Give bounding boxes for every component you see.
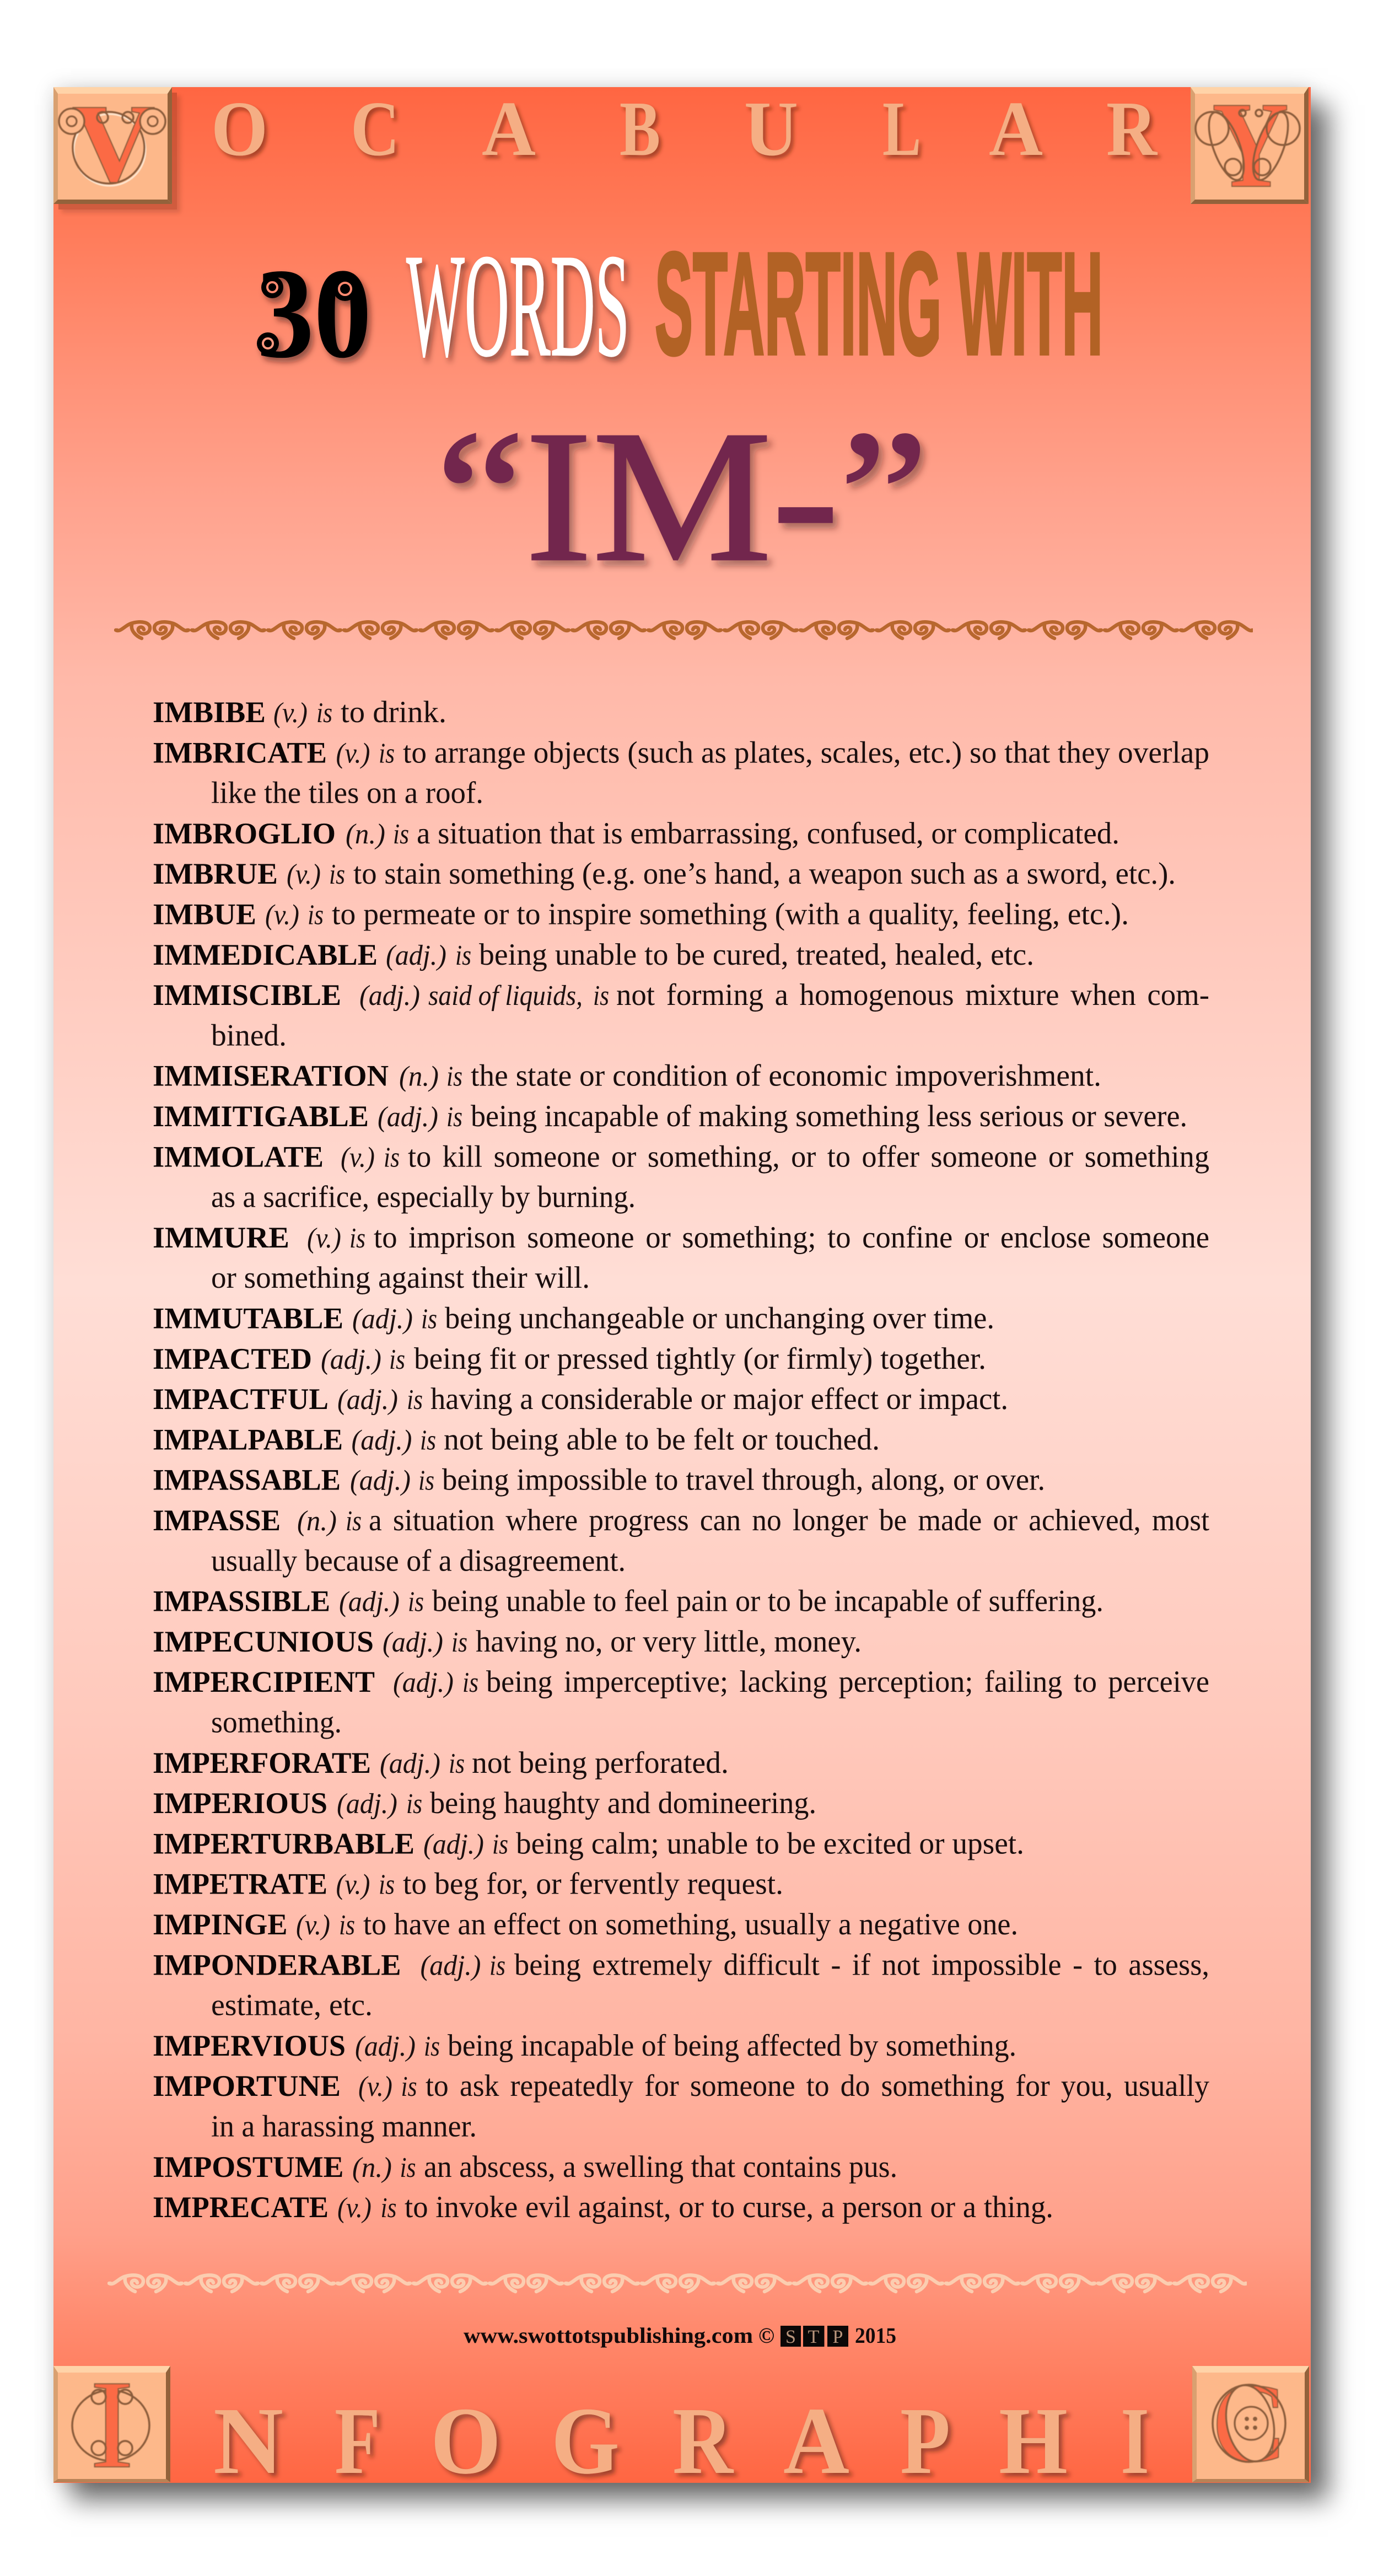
entry: imbibe [153,695,446,729]
entry: imponderable: (adj.) [420,1950,481,1981]
ornament divider: upper [114,620,1253,641]
entry: imbricate [153,735,1209,810]
entry: imperturbable: (adj.) [423,1829,484,1860]
entry: imponderable: is [489,1950,505,1981]
entry: imbibe: (v.) [273,697,308,729]
entry: imbue: to permeate or to inspire something (with a quality, feeling, etc.). [332,897,1129,932]
entry: impostume: is [400,2152,416,2184]
entry: impasse: a situation where progress can no longer be made or achieved, most [369,1503,1209,1537]
entry: impercipient: IMPERCIPIENT [153,1665,375,1698]
footer credit: 2015 [855,2323,896,2348]
entry: immolate: is [384,1142,400,1173]
entry: impetrate: to beg for, or fervently request. [403,1867,783,1901]
entry: imbricate: IMBRICATE [153,735,327,769]
entry: imbue: (v.) [265,900,299,931]
entry: impostume: (n.) [352,2152,392,2184]
entry: imbroglio: is [393,819,409,850]
entry: importune [153,2069,1209,2143]
entry: immiscible: is [593,980,609,1012]
heading band: OCABULAR letters: B [620,85,660,172]
entry: immiscible: IMMISCIBLE [153,978,341,1012]
heading band: OCABULAR letters: A [482,85,536,172]
entry: impostume [153,2150,897,2184]
entry: imperturbable [153,1826,1024,1860]
logo: STP: T [808,2327,820,2347]
entry: impassible [153,1584,1104,1618]
entry: impacted: (adj.) [321,1344,381,1375]
entry: imperious: is [406,1788,422,1820]
entry: imperforate [153,1746,729,1780]
entry: importune: in a harassing manner. [211,2109,477,2143]
entry: immure [153,1220,1209,1295]
entry: imbibe: to drink. [341,695,446,729]
entry: imprecate: is [380,2192,397,2224]
title line: 30 WORDS STARTING WITH [256,222,1103,387]
entry: impostume: IMPOSTUME [153,2150,344,2184]
entry: immiscible: not forming a homogenous mixture when com- [616,978,1209,1012]
icon: corner tile C: C [1212,2360,1287,2486]
logo: STP: S [785,2327,796,2347]
entry: immedicable: (adj.) [386,940,446,971]
entry: impasse: usually because of a disagreement. [211,1544,626,1578]
entry: imbrue: is [329,859,345,890]
icon: corner tile V [53,81,177,209]
entry: impacted: IMPACTED [153,1342,312,1375]
heading band: OCABULAR letters: L [882,85,921,172]
entry: imperious [153,1786,816,1820]
entry: imbroglio: IMBROGLIO [153,816,336,850]
main heading: IM-: “IM-” [435,391,929,600]
heading band: OCABULAR letters [211,85,1158,172]
entry: impecunious: having no, or very little, money. [476,1625,862,1659]
entry: imbrue: (v.) [287,859,321,890]
entry: impostume: an abscess, a swelling that contains pus. [424,2150,897,2184]
entry: impercipient: is [462,1667,478,1698]
icon: corner tile C [1192,2360,1309,2486]
footer band: NFOGRAPHI letters: G [551,2387,620,2494]
entry: imbibe: is [316,697,332,729]
entry: imprecate: to invoke evil against, or to curse, a person or a thing. [405,2190,1053,2224]
entry: impercipient: being imperceptive; lacking perception; failing to perceive [486,1665,1209,1699]
entry: impinge: is [339,1910,355,1941]
entry: impetrate: is [379,1869,395,1901]
heading band: OCABULAR letters: U [744,85,798,172]
entry: impassible: IMPASSIBLE [153,1584,330,1618]
entry: impinge: IMPINGE [153,1907,288,1941]
entry: impassible: being unable to feel pain or to be incapable of suffering. [432,1584,1104,1618]
entry: impercipient [153,1665,1209,1740]
heading band: OCABULAR letters: R [1106,85,1158,172]
footer credit: © [758,2323,774,2348]
entry: imperturbable: being calm; unable to be excited or upset. [516,1826,1024,1860]
entry: immolate: IMMOLATE [153,1139,324,1173]
entry: impassible: (adj.) [339,1587,400,1618]
icon: corner tile I [53,2354,170,2494]
entry: imperturbable: IMPERTURBABLE [153,1826,415,1860]
entry: imbrue: to stain something (e.g. one’s hand, a weapon such as a sword, etc.). [353,857,1176,891]
entry: imbrue: IMBRUE [153,857,278,890]
entry: immedicable: is [455,940,471,971]
footer credit: www.swottotspublishing.com [464,2323,753,2348]
entry: immolate [153,1139,1209,1214]
entry: impassable [153,1463,1045,1497]
footer band: NFOGRAPHI letters: I [1121,2387,1149,2494]
entry: immutable: (adj.) [352,1303,413,1335]
entry: imperforate: not being perforated. [472,1746,729,1780]
entry: impassable: being impossible to travel through, along, or over. [442,1463,1045,1497]
footer band: NFOGRAPHI letters: R [672,2387,734,2494]
entry: immure: is [349,1223,365,1254]
entry: imperious: being haughty and domineering. [430,1786,816,1820]
entry: immiseration: the state or condition of economic impoverishment. [471,1059,1101,1093]
entry: imperturbable: is [492,1829,508,1860]
ornament divider: lower [107,2273,1247,2294]
footer credit [464,2323,896,2348]
entry: immitigable: is [446,1101,462,1133]
entry: impactful [153,1382,1008,1416]
entry: impalpable [153,1422,880,1456]
entry: imbroglio: a situation that is embarrassing, confused, or complicated. [417,816,1119,851]
footer band: NFOGRAPHI letters: A [783,2387,849,2494]
entry: impercipient: (adj.) [393,1667,454,1698]
entry: immiseration [153,1059,1101,1093]
entry: impasse: (n.) [297,1505,337,1537]
entry: impasse: IMPASSE [153,1503,281,1537]
entry: imperious: (adj.) [337,1788,397,1820]
title line: 30 WORDS STARTING WITH: WORDS [406,223,629,387]
heading band: OCABULAR letters: A [989,85,1043,172]
icon: corner tile V: V [72,81,155,205]
entry: impasse: is [346,1505,362,1537]
entry: immiscible: bined. [211,1018,287,1052]
entry: impecunious: (adj.) [383,1627,443,1658]
entry: impassable: IMPASSABLE [153,1463,341,1497]
entry: immiseration: IMMISERATION [153,1059,389,1093]
entry: immitigable: being incapable of making something less serious or severe. [471,1099,1187,1133]
entry: impassable: (adj.) [350,1465,411,1497]
entry: immure: or something against their will. [211,1261,590,1295]
heading band: OCABULAR letters: C [351,85,400,172]
entry: impetrate: IMPETRATE [153,1867,327,1901]
entry: imperforate: IMPERFORATE [153,1746,371,1779]
footer band: NFOGRAPHI letters [213,2387,1149,2494]
entry: impinge: to have an effect on something, usually a negative one. [363,1907,1018,1942]
entry: imperforate: is [449,1748,465,1779]
entry: immutable: is [421,1303,437,1335]
logo: STP [780,2326,848,2347]
footer band: NFOGRAPHI letters: N [213,2387,283,2494]
entry: immolate: as a sacrifice, especially by burning. [211,1180,636,1214]
entry: impalpable: IMPALPABLE [153,1422,343,1456]
entry: impervious [153,2029,1016,2063]
entry: imbue: is [308,900,324,931]
entry: imperforate: (adj.) [380,1748,440,1779]
entry: imbricate: is [379,738,395,769]
entry: importune: is [401,2071,417,2102]
entry: importune: to ask repeatedly for someone to do something for you, usually [426,2069,1209,2103]
entry: immure: to imprison someone or something; to confine or enclose someone [374,1220,1209,1255]
entry: immolate: to kill someone or something, or to offer someone or something [408,1139,1209,1174]
entry: imponderable: IMPONDERABLE [153,1948,401,1981]
entry: imbroglio: (n.) [346,819,385,850]
entry: importune: IMPORTUNE [153,2069,341,2102]
word list [153,695,1209,2224]
entry: imprecate: (v.) [337,2192,372,2224]
entry: imbue: IMBUE [153,897,256,931]
entry: impervious: is [424,2031,440,2062]
entry: impactful: is [407,1384,423,1416]
entry: impecunious: IMPECUNIOUS [153,1625,374,1658]
entry: impassible: is [408,1587,424,1618]
entry: imbricate: like the tiles on a roof. [211,776,483,810]
entry: imbibe: IMBIBE [153,695,266,729]
entry: impactful: having a considerable or major effect or impact. [430,1382,1008,1416]
entry: impacted: being fit or pressed tightly (or firmly) together. [414,1342,986,1376]
entry: imprecate: IMPRECATE [153,2190,329,2224]
entry: impecunious [153,1625,862,1659]
entry: impinge: (v.) [296,1910,330,1941]
entry: immiscible: (adj.) [359,980,420,1012]
footer band: NFOGRAPHI letters: H [999,2387,1068,2494]
footer band: NFOGRAPHI letters: P [900,2387,950,2494]
entry: immedicable: being unable to be cured, treated, healed, etc. [479,938,1034,972]
entry: immiscible: said of liquids, [428,980,583,1012]
footer band: NFOGRAPHI letters: O [430,2387,501,2494]
entry: immure: IMMURE [153,1220,289,1254]
entry: immutable: IMMUTABLE [153,1301,343,1335]
entry: impercipient: something. [211,1706,342,1740]
entry: impecunious: is [451,1627,467,1658]
entry: immitigable: (adj.) [378,1101,438,1133]
logo: STP: P [833,2327,843,2347]
entry: impalpable: (adj.) [352,1424,412,1456]
heading band: OCABULAR letters: O [211,85,268,172]
entry: immutable: being unchangeable or unchanging over time. [445,1301,994,1335]
footer band: NFOGRAPHI letters: F [335,2387,380,2494]
icon: corner tile Y: Y [1212,77,1289,213]
entry: immiseration: is [446,1061,462,1093]
entry: impervious: (adj.) [355,2031,416,2062]
entry: imponderable: being extremely difficult - if not impossible - to assess, [514,1948,1209,1982]
entry: impetrate: (v.) [336,1869,370,1901]
entry: impassable: is [418,1465,434,1497]
entry: impasse [153,1503,1209,1578]
entry: imponderable: estimate, etc. [211,1988,373,2023]
entry: importune: (v.) [358,2071,392,2102]
entry: immutable [153,1301,994,1335]
entry: immiseration: (n.) [399,1061,439,1093]
icon: corner tile I: I [90,2354,134,2494]
entry: immedicable [153,938,1034,972]
entry: immure: (v.) [307,1223,341,1254]
entry: impervious: being incapable of being affected by something. [448,2029,1016,2063]
entry: impacted: is [389,1344,405,1375]
entry: impetrate [153,1867,783,1901]
entry: impalpable: is [420,1424,436,1456]
number 30: 30 [256,241,372,385]
entry: immiscible [153,978,1209,1052]
entry: immedicable: IMMEDICABLE [153,938,378,971]
entry: impalpable: not being able to be felt or touched. [444,1422,880,1456]
entry: impervious: IMPERVIOUS [153,2029,346,2062]
entry: impactful: IMPACTFUL [153,1382,329,1416]
entry: imponderable [153,1948,1209,2023]
entry: impactful: (adj.) [337,1384,398,1416]
entry: immitigable: IMMITIGABLE [153,1099,369,1133]
entry: imbricate: to arrange objects (such as plates, scales, etc.) so that they overlap [403,735,1209,770]
entry: immolate: (v.) [341,1142,375,1173]
entry: immitigable [153,1099,1187,1133]
entry: imperious: IMPERIOUS [153,1786,327,1820]
entry: impacted [153,1342,986,1376]
entry: imbricate: (v.) [336,738,370,769]
